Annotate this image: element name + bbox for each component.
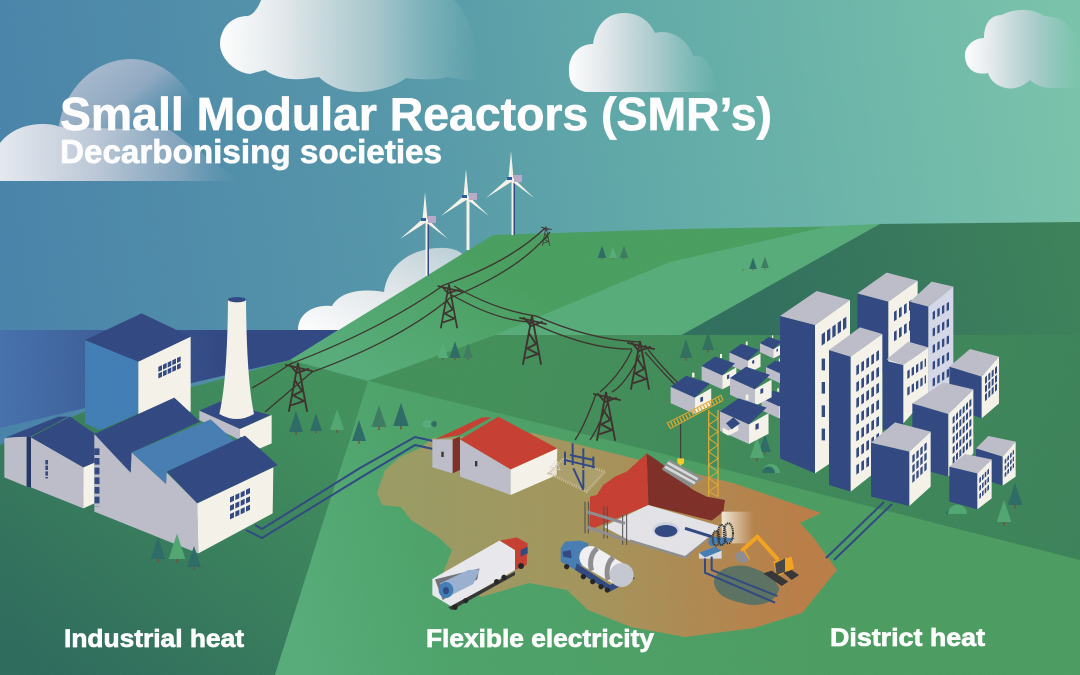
block: small right — [976, 436, 1016, 486]
block: front cube — [871, 422, 931, 506]
crane — [667, 395, 723, 497]
chimney — [199, 297, 272, 448]
wind turbines — [400, 151, 534, 276]
block: small middle — [949, 454, 992, 509]
main hall — [94, 398, 278, 553]
block: right — [949, 349, 999, 418]
label: industrial heat: Industrial heat — [64, 625, 245, 653]
pipes: city to site — [826, 502, 892, 560]
block: wide — [912, 382, 973, 477]
building: industrial plant — [4, 297, 278, 553]
ground: upper hill — [0, 222, 1080, 675]
pipes on hook — [662, 459, 703, 487]
subtitle: Decarbonising societies — [60, 133, 442, 170]
tunnel boring machine — [685, 523, 735, 559]
cloud: pale behind title — [58, 59, 207, 140]
excavation pit — [714, 565, 779, 605]
ground: middle field — [368, 335, 1080, 562]
pipes: factory to site — [246, 437, 433, 538]
power lines and pylons — [252, 226, 685, 440]
trees — [289, 245, 1022, 525]
ground: light hill band — [495, 224, 880, 337]
cloud: top middle right — [569, 13, 718, 92]
glow from tunnel — [722, 512, 753, 543]
excavator — [735, 537, 799, 586]
cloud: lower left — [0, 124, 240, 181]
truck: tanker — [561, 541, 635, 593]
small wing — [4, 417, 97, 508]
construction site — [432, 395, 799, 610]
block: tall front left — [780, 291, 850, 473]
cloud: top right corner — [965, 10, 1080, 89]
underground pipes — [705, 557, 777, 603]
city: houses — [671, 335, 791, 444]
truck: white trailer with turbine — [432, 537, 528, 610]
tower block — [85, 313, 191, 430]
substation — [549, 443, 605, 492]
city: apartment blocks — [780, 273, 1016, 509]
label: flexible electricity: Flexible electricity — [426, 625, 654, 653]
block: second tall — [829, 327, 882, 492]
cloud: behind hill — [298, 248, 467, 330]
block: mid — [883, 342, 928, 430]
sand: construction site — [377, 433, 837, 637]
sea — [0, 330, 338, 428]
trees: at plant — [151, 534, 201, 570]
block: lilac — [910, 282, 953, 403]
reactor pit walls and floor — [589, 453, 725, 559]
title: Small Modular Reactors (SMR’s) — [60, 88, 772, 140]
ground: light foreground — [275, 381, 1080, 675]
label: district heat: District heat — [830, 624, 986, 652]
barn — [432, 417, 557, 495]
cloud: top centre — [220, 0, 480, 92]
scaffolding — [585, 502, 627, 545]
ground: dark upper right — [678, 222, 1080, 340]
ground: lower left field — [0, 360, 368, 675]
bushes — [422, 420, 967, 514]
block: back — [857, 273, 918, 373]
